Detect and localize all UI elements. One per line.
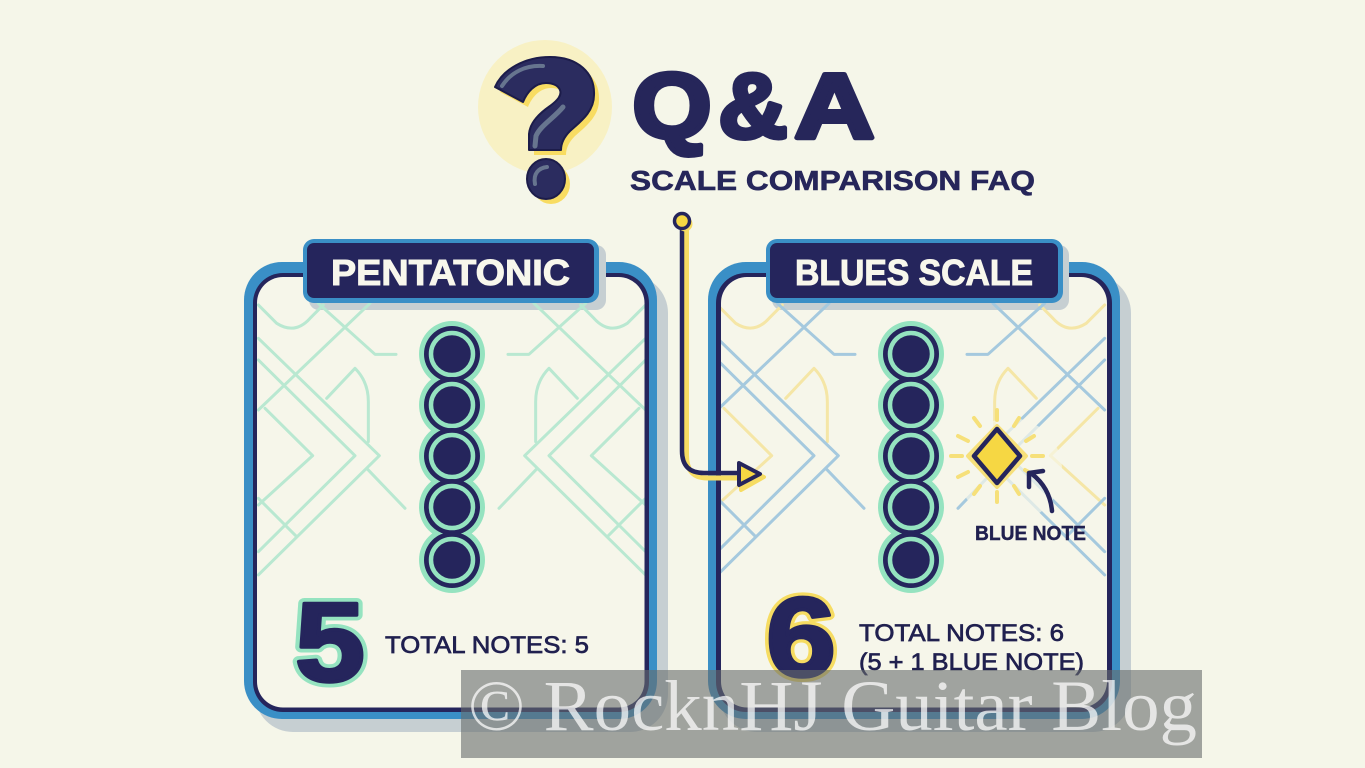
- icon: question mark: [478, 40, 612, 204]
- arrow: to blue note: [1029, 471, 1052, 511]
- watermark: © RocknHJ Guitar Blog: [468, 666, 1197, 746]
- fretboard pattern: pentatonic: [258, 303, 646, 575]
- label: blue note: BLUE NOTE: [975, 523, 1086, 545]
- heading: pentatonic: [303, 239, 599, 303]
- text: total notes 6: [859, 620, 1084, 676]
- panel: blues scale: [708, 239, 1131, 732]
- text: total notes 6: TOTAL NOTES: 6: [859, 620, 1064, 647]
- panel: pentatonic: [244, 239, 668, 732]
- note circles: blues: [878, 321, 944, 593]
- title: Q: [632, 56, 712, 158]
- title: &: [718, 56, 788, 158]
- title: [632, 56, 874, 158]
- text: total notes 6: (5 + 1 BLUE NOTE): [859, 649, 1084, 676]
- heading: pentatonic: PENTATONIC: [331, 252, 570, 293]
- arrow: connector: [674, 214, 764, 490]
- big number 5: 5: [295, 580, 365, 705]
- title: A: [794, 56, 874, 158]
- text: total notes 5: TOTAL NOTES: 5: [385, 632, 589, 659]
- fretboard pattern: blues: [717, 303, 1105, 575]
- big number 6: 6: [766, 575, 836, 700]
- note circles: pentatonic: [419, 321, 485, 593]
- heading: blues scale: [766, 239, 1063, 303]
- subtitle: SCALE COMPARISON FAQ: [630, 165, 1035, 196]
- icon: blue note diamond: [951, 410, 1043, 502]
- big number 6: 6: [766, 575, 836, 700]
- big number 5: 5: [295, 580, 365, 705]
- heading: blues scale: BLUES SCALE: [795, 252, 1033, 293]
